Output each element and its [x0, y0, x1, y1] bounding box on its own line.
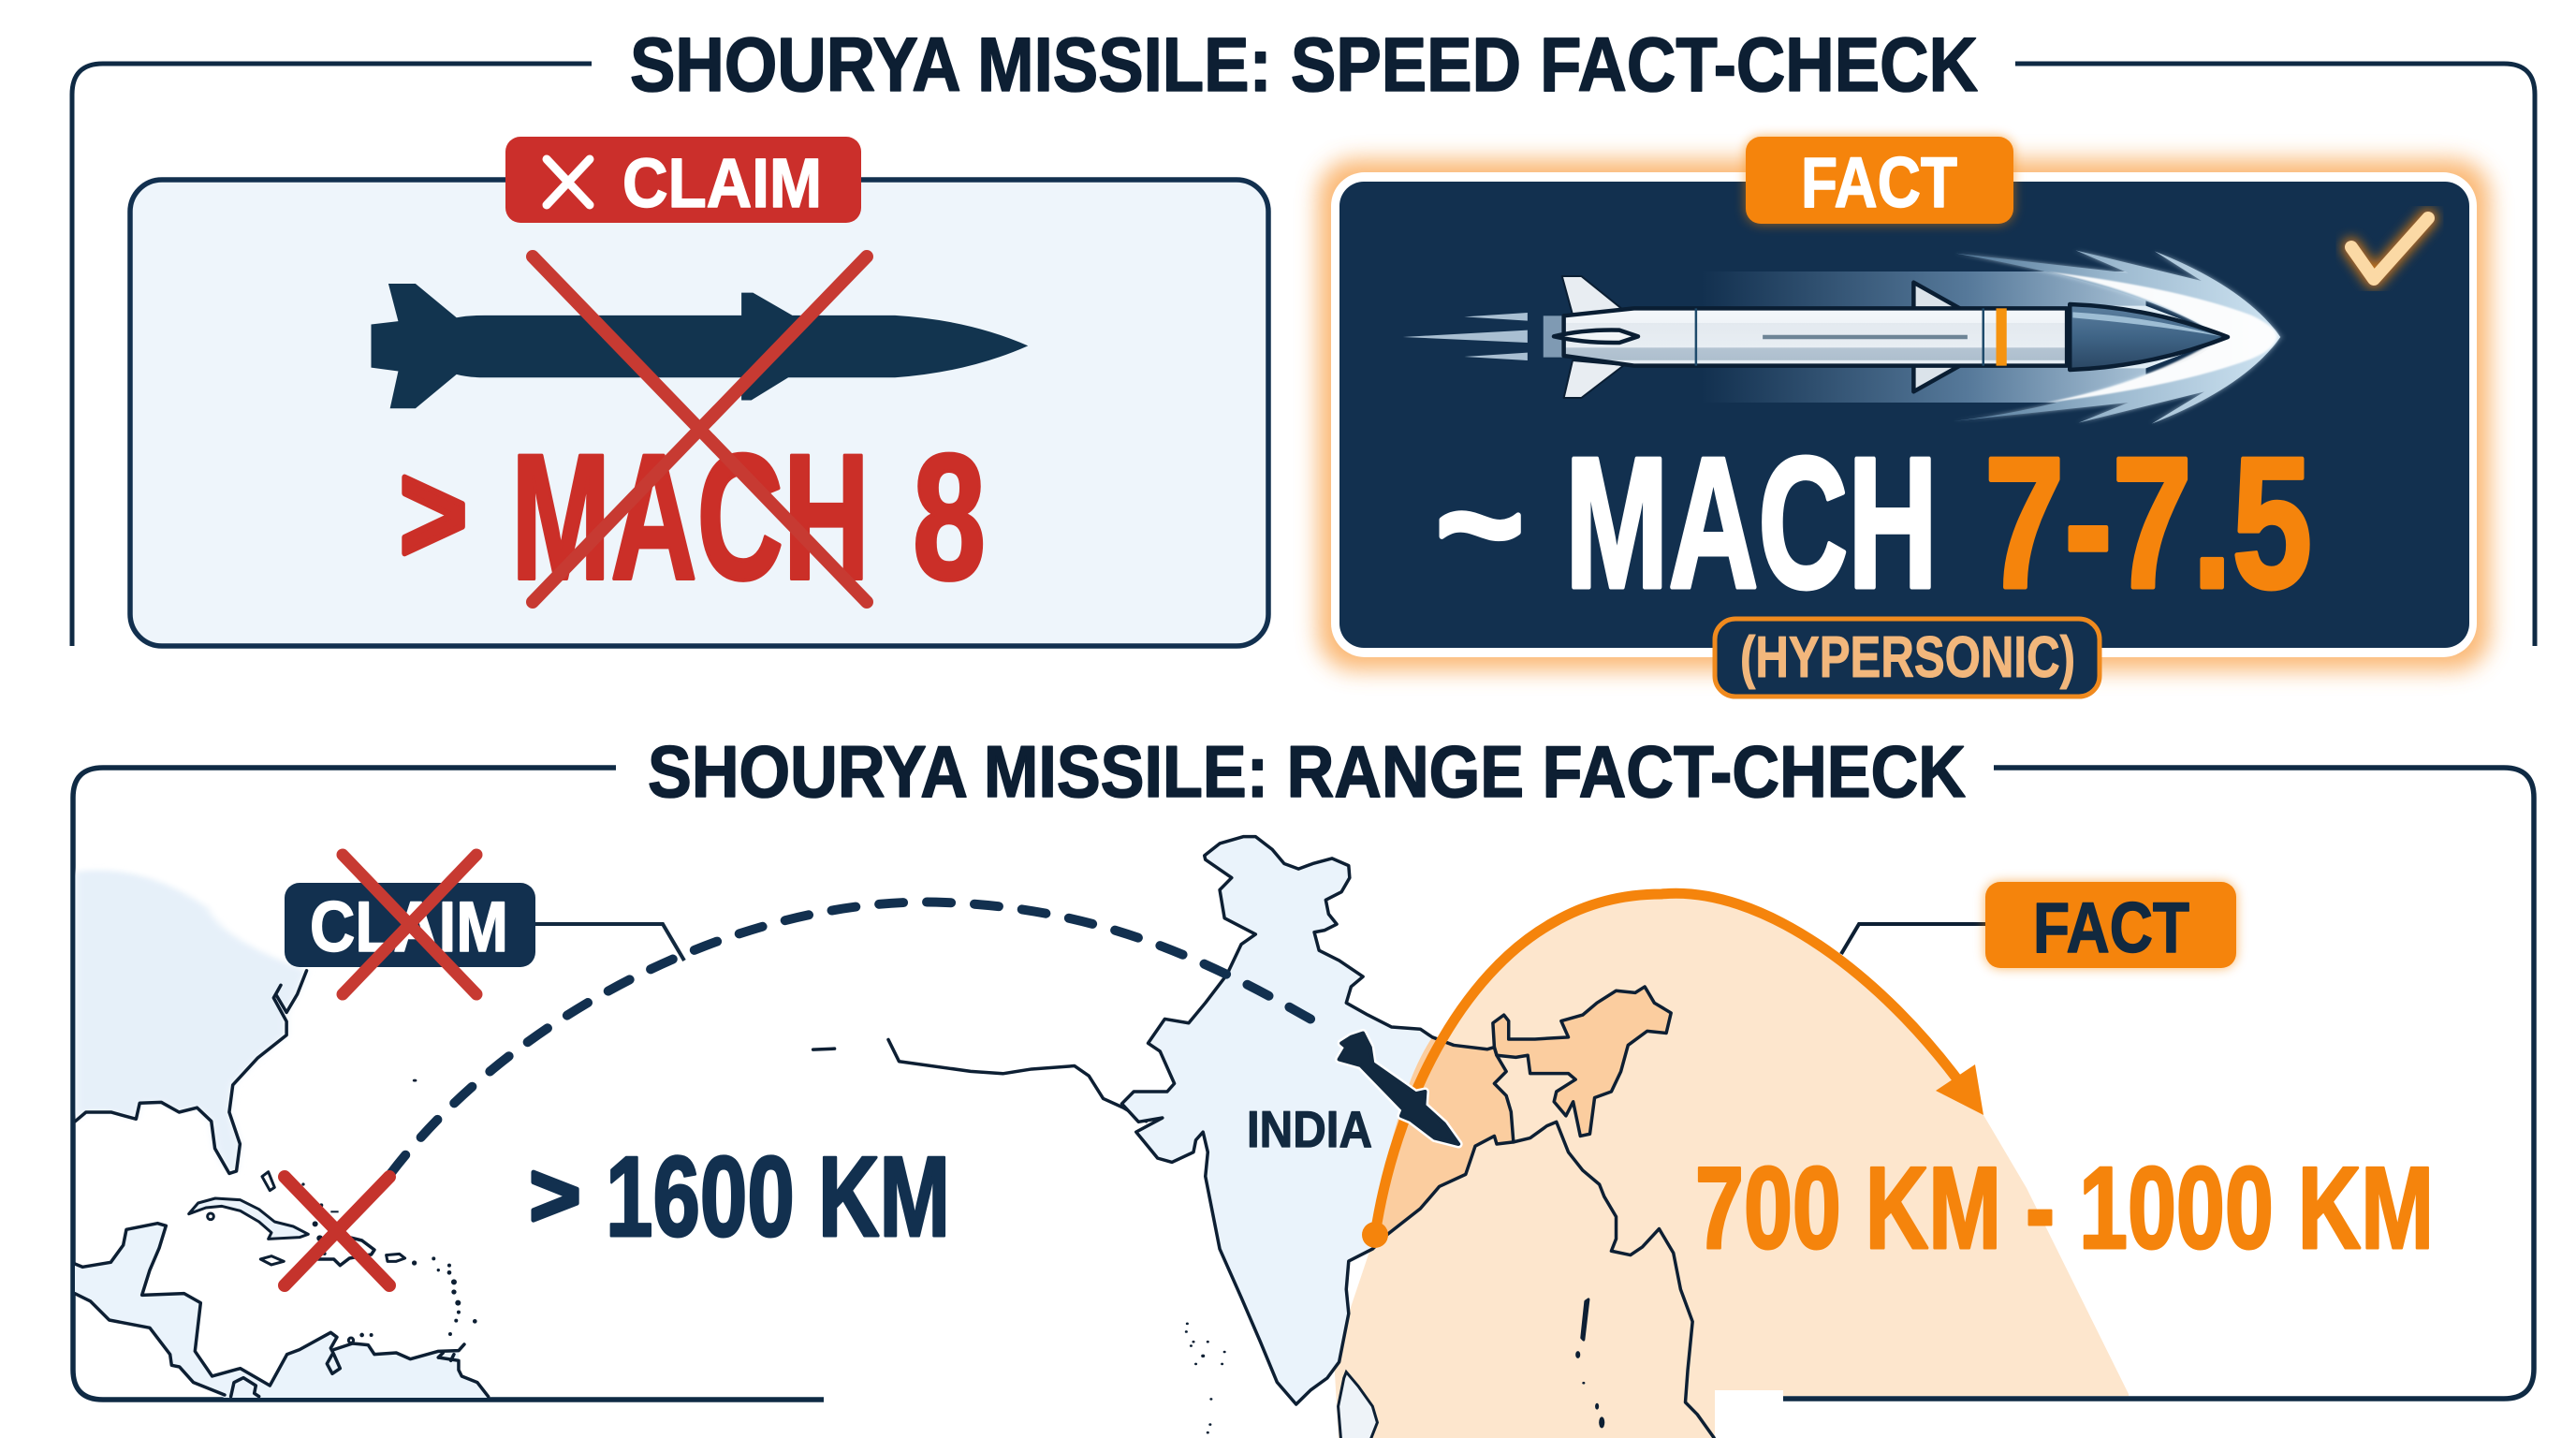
badge: fact — [1746, 137, 2013, 224]
claimed speed value: 8 — [913, 418, 986, 617]
claimed speed value: > — [400, 434, 467, 592]
panel: speed fact-check frame — [72, 64, 2535, 646]
actual speed value: ~ — [1436, 435, 1524, 613]
icon: red cross over claim — [533, 257, 867, 602]
icon: claimed missile silhouette — [371, 284, 1028, 408]
actual speed value: 7-7.5 — [1984, 419, 2312, 627]
arrow: claimed range dashed trajectory — [390, 902, 1329, 1174]
panel: speed fact — [1318, 137, 2490, 697]
icon: red cross on caribbean target — [285, 1177, 389, 1285]
map: atlantic and caribbean — [75, 870, 1146, 1398]
india landmass — [1124, 839, 1431, 1402]
map: india and region — [1121, 837, 1714, 1438]
callout: range claim — [285, 855, 684, 994]
badge: claim: CLAIM — [622, 144, 822, 222]
claimed speed value: MACH — [511, 418, 870, 617]
icon: hypersonic missile — [1403, 250, 2280, 424]
badge: fact: FACT — [1801, 143, 1957, 223]
claimed range value: 1600 KM — [606, 1133, 950, 1260]
map: fact range area — [1334, 893, 2129, 1438]
northeast india — [1493, 987, 1671, 1136]
claimed range value: > — [530, 1146, 580, 1245]
india eastern coast within range — [1375, 1037, 1514, 1235]
icon: check mark — [2351, 218, 2428, 279]
actual speed value: MACH — [1565, 419, 1938, 627]
panel: speed claim — [130, 137, 1268, 646]
callout: range fact: FACT — [2033, 888, 2189, 968]
icon: missile on india map — [1339, 1034, 1458, 1144]
label: india: INDIA — [1247, 1100, 1372, 1158]
title: speed fact-check: SHOURYA MISSILE: SPEED FACT-CHECK — [630, 22, 1978, 108]
badge: claim — [505, 137, 861, 223]
pill: hypersonic: (HYPERSONIC) — [1740, 625, 2075, 690]
claimed range value — [530, 1133, 950, 1260]
sri lanka — [1339, 1372, 1377, 1438]
callout: range claim: CLAIM — [310, 888, 508, 967]
pill: hypersonic — [1715, 619, 2100, 697]
arrow: actual range trajectory — [1362, 893, 1983, 1248]
callout: range fact — [1841, 882, 2236, 968]
title: range fact-check: SHOURYA MISSILE: RANGE FACT-CHECK — [648, 730, 1966, 813]
actual speed value — [1436, 419, 2312, 627]
panel: range fact-check frame — [73, 768, 2534, 1400]
